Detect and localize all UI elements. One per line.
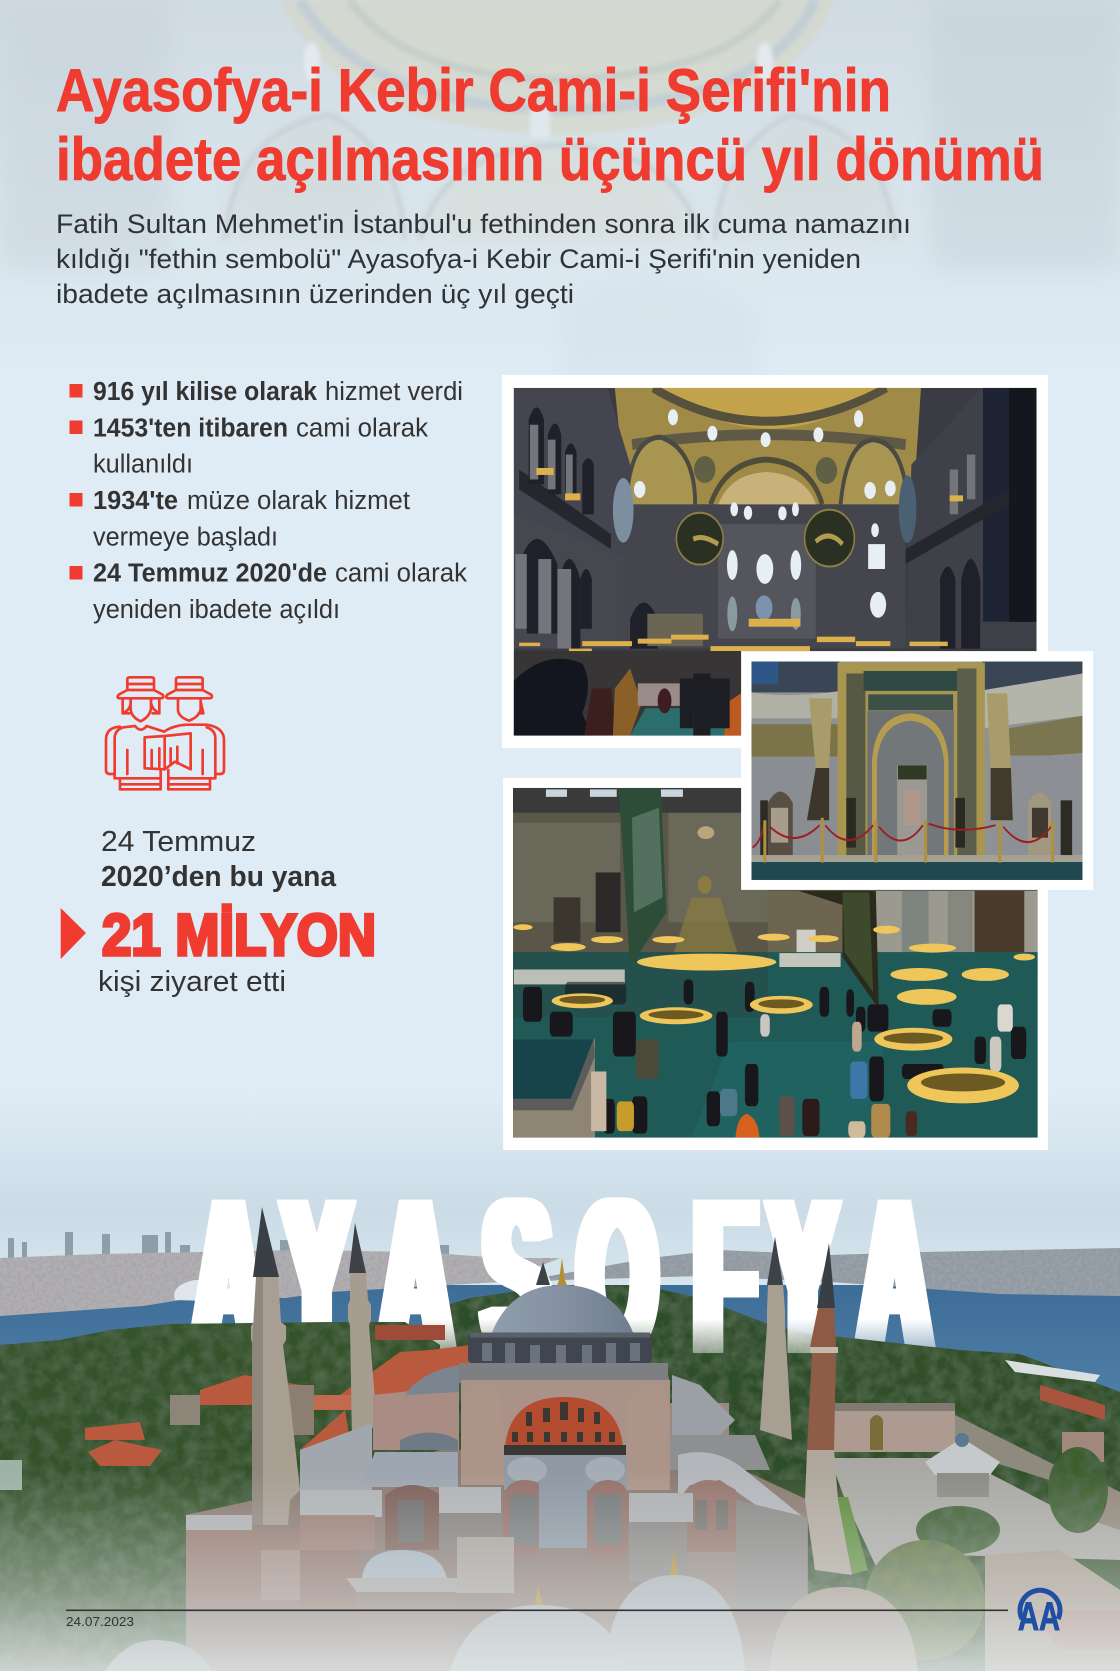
red roofs left [85,1325,470,1466]
main dome [491,1285,634,1335]
left drums and roofs [186,1365,501,1610]
minaret: front left [251,1207,300,1525]
red arch [504,1397,626,1455]
plaza [830,1458,1120,1575]
building: Hagia Sophia [186,1258,808,1671]
central wall [461,1380,670,1480]
bullet: 916: 916 yıl kilise olarak [93,378,318,406]
dome finial [556,1258,568,1288]
red roofs right [1040,1385,1105,1420]
intro text: ibadete açılmasının üzerinden üç yıl geçti [56,279,574,309]
bullet: 2020: cami olarak [335,560,467,588]
lawn [832,1497,868,1575]
statistic date line: 24 Temmuz [101,826,256,858]
right lower roofs [985,1550,1120,1671]
intro text: Fatih Sultan Mehmet'in İstanbul'u fethinden sonra ilk cuma namazını [56,208,911,239]
minaret: back left [348,1223,377,1440]
right tree [1048,1447,1108,1533]
dome drum [468,1333,652,1365]
bullet: 2020 [70,560,467,624]
arrow [61,908,86,959]
landscape background: city and sea [0,1232,1120,1671]
dome center [605,1575,745,1671]
landscape: central tree line [425,1285,860,1480]
intro text [56,208,911,309]
landscape sky [0,1090,1120,1290]
bullet: 1934: müze olarak hizmet [187,487,410,515]
bullet: 1934: vermeye başladı [93,523,278,551]
visitor statistic [61,826,376,998]
small dome lower left [362,1550,447,1578]
building base mass [186,1450,808,1671]
photo 2: crowd and chandeliers [503,778,1048,1150]
background: faded interior photo [0,0,1120,380]
photo collage [502,375,1093,1150]
footer rule [66,1610,1008,1611]
intro text: kıldığı "fethin sembolü" Ayasofya-i Kebir Cami-i Şerifi'nin yeniden [56,244,861,274]
logo: AA [1018,1590,1060,1639]
bullet: 1453: kullanıldı [93,451,193,479]
icon: two visitors with hats reading a guide [106,677,224,789]
right drums and roofs [629,1375,807,1612]
small rear turret [536,1262,550,1285]
lower domes [105,1550,918,1671]
big word: AYASOFYA: AYASOFYA [192,1154,931,1400]
bullet: 1934 [70,487,410,551]
bullet: 2020: 24 Temmuz 2020'de [93,560,327,588]
statistic date line bold: 2020’den bu yana [101,861,337,893]
landscape: left trees [0,1322,440,1671]
minaret: back right [760,1237,792,1440]
bullet: 2020: yeniden ibadete açıldı [93,596,340,624]
dome far left [105,1640,212,1671]
logo: AA: AA [1018,1595,1060,1639]
landscape: right trees [800,1336,1120,1671]
bullet: 1453: 1453'ten itibaren [93,414,288,442]
minaret: front right [805,1243,852,1575]
history bullet list [70,378,467,624]
title: Ayasofya-i Kebir Cami-i Şerifi'nin [56,57,891,124]
dome left [450,1605,628,1671]
bullet: 1453 [70,414,428,479]
central roofs [504,1455,627,1490]
landscape: surroundings [0,1325,1120,1671]
title [56,57,1044,193]
statistic value: 21 MİLYON [102,903,376,968]
palace wall [830,1403,955,1452]
dome right [770,1587,918,1671]
photo 3: mihrab [741,651,1093,890]
buttresses [461,1383,504,1485]
lower arches [503,1480,546,1555]
photo 1: interior nave and dome [502,375,1048,748]
bullet: 1453: cami olarak [296,414,428,442]
bullet: 916 [70,378,463,406]
bullet: 1934: 1934'te [93,487,178,515]
bullet: 916: hizmet verdi [325,378,463,406]
date: 24.07.2023 [66,1614,134,1629]
statistic caption: kişi ziyaret etti [98,966,286,998]
roof band [459,1363,670,1383]
fountain kiosk [925,1433,1000,1497]
bottom fade overlay [0,1470,1120,1671]
